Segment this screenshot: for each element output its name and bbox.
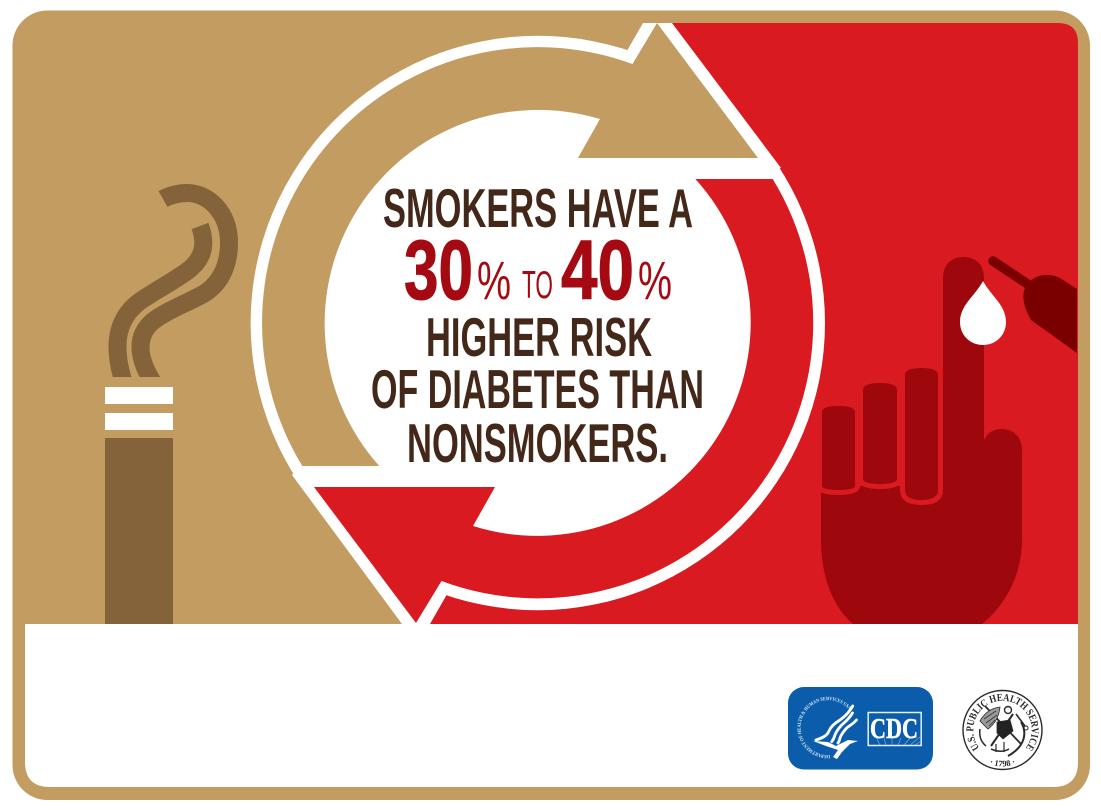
text line: nonsmokers: NONSMOKERS. <box>407 413 668 474</box>
cigarette body <box>105 438 173 624</box>
cigarette bands <box>105 387 173 404</box>
curled fingers <box>820 366 940 502</box>
panel: white footer <box>25 624 1078 787</box>
icon: hand with blood drop and lancet <box>820 257 1077 624</box>
HHS circular text: DEPARTMENT OF HEALTH & HUMAN SERVICES USA <box>797 696 851 758</box>
statistic: 30% to 40%: TO <box>522 264 553 307</box>
seal text: U.S. PUBLIC HEALTH SERVICE <box>966 694 1039 752</box>
arrow: tan circular arrow <box>262 23 758 466</box>
statistic: 30% to 40%: 40 <box>561 223 634 317</box>
CDC wordmark: CDC <box>870 713 918 745</box>
hand palm, index finger and thumb <box>821 257 1022 624</box>
statistic: 30% to 40%: % <box>638 251 672 311</box>
headline text <box>371 178 704 474</box>
cigarette smoke <box>117 193 229 390</box>
statistic: 30% to 40% <box>404 223 672 317</box>
blood drop <box>960 281 1006 345</box>
icon: cigarette with smoke <box>105 193 229 624</box>
CDC box <box>868 712 921 746</box>
lancet <box>993 261 1077 353</box>
logo: US Public Health Service seal <box>962 690 1043 770</box>
seal emblem <box>980 706 1028 756</box>
panel: red background <box>430 23 1078 624</box>
white circle behind arrows <box>251 23 825 624</box>
HHS eagle <box>813 706 858 759</box>
text line: of diabetes than: OF DIABETES THAN <box>371 359 704 420</box>
text line: smokers have a: SMOKERS HAVE A <box>383 178 693 239</box>
statistic: 30% to 40%: 30 <box>404 223 473 317</box>
text line: higher risk: HIGHER RISK <box>426 307 652 368</box>
arrow: red circular arrow <box>314 179 813 623</box>
logo: HHS and CDC <box>788 687 933 770</box>
statistic: 30% to 40%: % <box>477 251 511 311</box>
seal year: · 1798 · <box>990 760 1014 766</box>
